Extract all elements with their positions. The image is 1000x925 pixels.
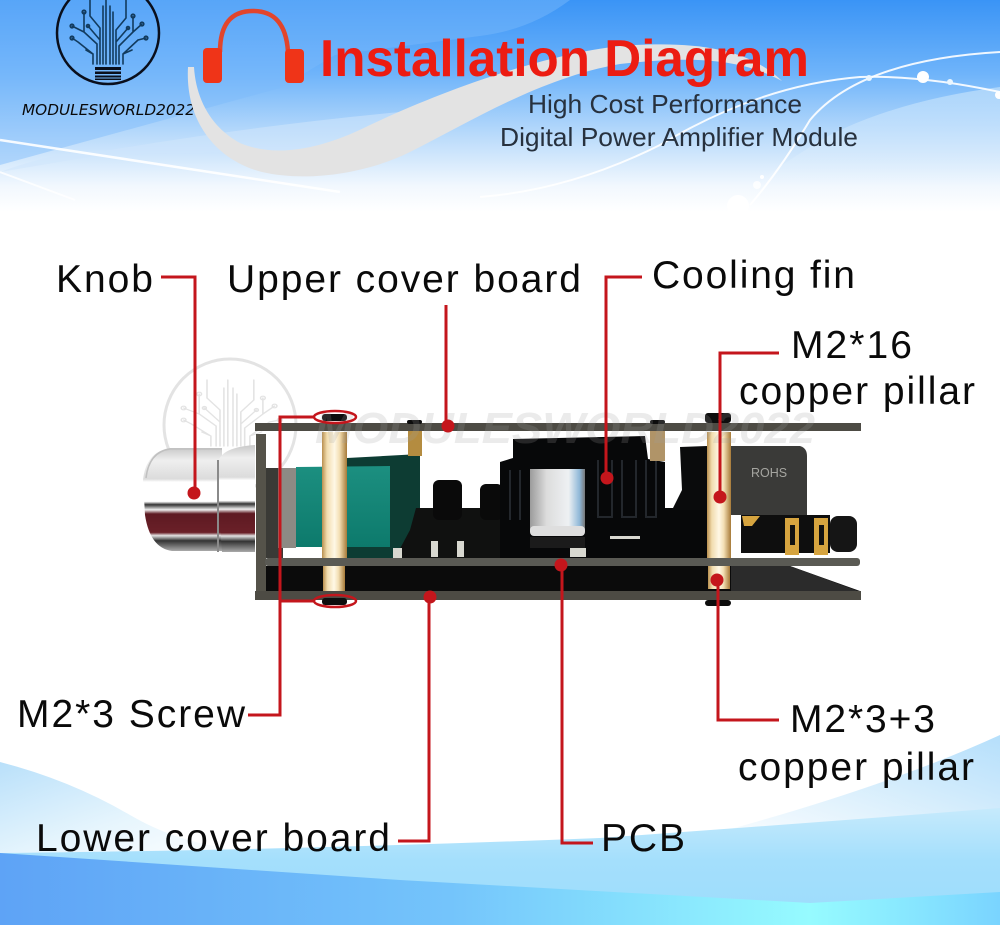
callout: lower cover board: Lower cover board bbox=[36, 817, 390, 860]
upper cover board bbox=[255, 423, 861, 431]
callout: upper cover board: Upper cover board bbox=[227, 258, 581, 301]
PCB bbox=[265, 558, 860, 566]
logo name: MODULESWORLD2022 bbox=[22, 101, 195, 119]
icon: headphones bbox=[203, 11, 304, 83]
callout: M2*3 screw bbox=[17, 411, 356, 736]
front panel bbox=[256, 434, 266, 591]
watermark text: MODULESWORLD2022 bbox=[315, 404, 816, 453]
swoosh bbox=[188, 44, 782, 176]
copper pillar front lower bbox=[323, 566, 345, 591]
callout: M2*3+3 copper pillar: M2*3+3 bbox=[790, 698, 935, 741]
callout: M2*16 copper pillar bbox=[714, 324, 975, 504]
callout: M2*3+3 copper pillar bbox=[710, 574, 974, 789]
copper pillar rear upper bbox=[707, 432, 731, 558]
subtitle line 1: High Cost Performance bbox=[528, 89, 802, 119]
callout: M2*3+3 copper pillar: copper pillar bbox=[738, 746, 974, 789]
jack body bbox=[672, 446, 857, 555]
callout: upper cover board bbox=[227, 258, 581, 432]
teal block bbox=[296, 466, 390, 547]
potentiometer body bbox=[266, 468, 283, 558]
capacitor bbox=[530, 469, 640, 557]
callout: cooling fin: Cooling fin bbox=[652, 254, 855, 297]
title: Installation Diagram bbox=[320, 30, 809, 88]
callout: M2*16 copper pillar: copper pillar bbox=[739, 370, 975, 413]
subtitle line 2: Digital Power Amplifier Module bbox=[500, 122, 858, 152]
callout: M2*3 screw: M2*3 Screw bbox=[17, 693, 246, 736]
black underside bbox=[266, 566, 860, 591]
callout: lower cover board bbox=[36, 590, 436, 860]
copper pillar rear lower bbox=[708, 566, 730, 589]
cooling fin heatsink bbox=[500, 436, 707, 558]
callout: PCB bbox=[554, 558, 685, 860]
callout: cooling fin bbox=[600, 254, 855, 484]
module product photo bbox=[143, 413, 861, 606]
jack body: ROHS bbox=[751, 466, 787, 480]
copper pillar front upper bbox=[322, 432, 347, 558]
screws bbox=[322, 413, 731, 606]
callout: PCB: PCB bbox=[601, 817, 685, 860]
rear standoff bbox=[408, 431, 422, 456]
dark relay bbox=[347, 454, 420, 558]
lower cover board bbox=[255, 591, 861, 600]
callout: knob: Knob bbox=[56, 258, 153, 301]
knob bbox=[143, 445, 255, 552]
logo bbox=[57, 0, 159, 84]
callout: knob bbox=[56, 258, 200, 500]
watermark logo bbox=[164, 359, 296, 491]
callout: M2*16 copper pillar: M2*16 bbox=[791, 324, 912, 367]
board electronics bbox=[395, 508, 510, 558]
